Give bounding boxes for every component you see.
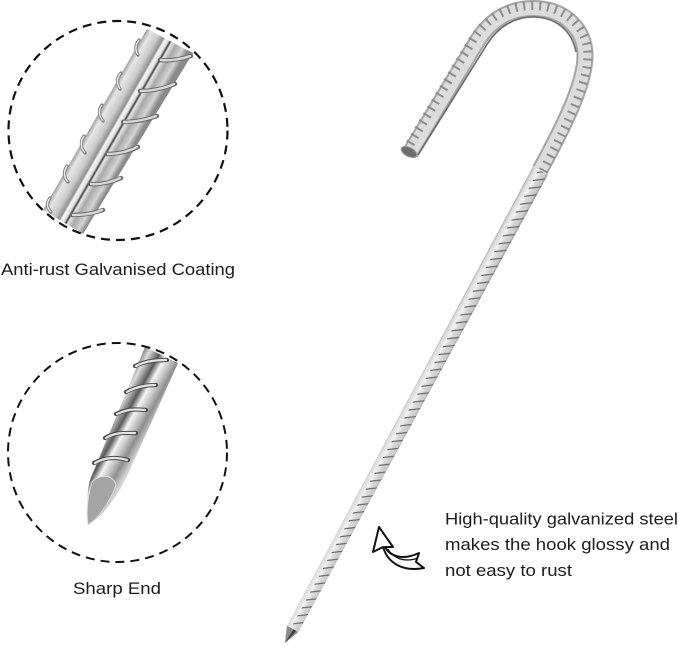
detail photo: ribbed galvanised rod [43,29,193,234]
dashed circle [8,21,228,240]
hook cut end [399,144,419,160]
straight shaft with spiral ribs [278,167,548,646]
hook bend [406,6,588,171]
main product: J-shaped galvanised hook stake [278,6,588,646]
text block: steel description: High-quality galvanized steel [445,510,678,528]
label: sharp end: Sharp End [73,579,161,598]
text block: steel description: makes the hook glossy and [445,535,670,554]
panel: anti-rust coating detail [8,21,228,240]
panel: sharp end detail [8,343,227,562]
icon: curved arrow pointing at hook [373,527,424,569]
text block: steel description [445,510,678,580]
label: anti-rust coating: Anti-rust Galvanised Coating [1,260,235,279]
dashed circle [8,343,227,562]
detail photo: pointed rod tip [87,347,178,525]
text block: steel description: not easy to rust [445,561,572,580]
